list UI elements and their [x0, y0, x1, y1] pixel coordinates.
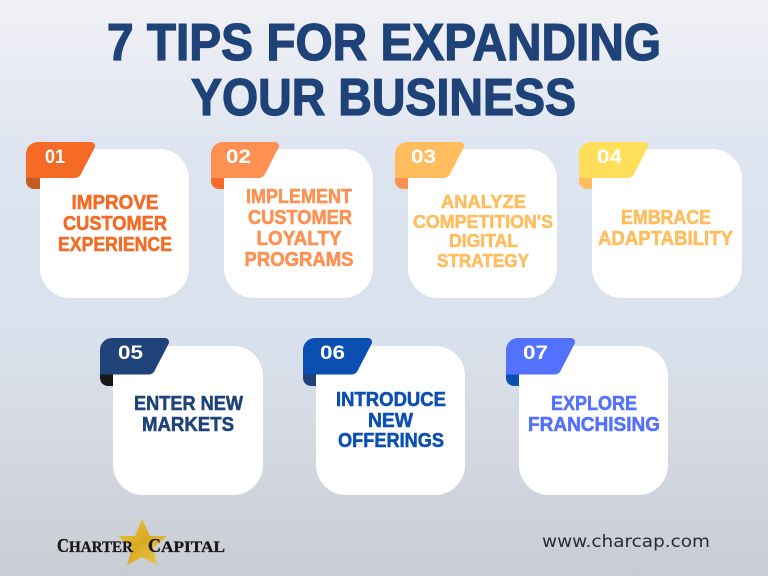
panel: tip 02: CUSTOMER — [248, 207, 352, 229]
panel: tip 03: 03 — [411, 147, 436, 168]
panel: tip 05 — [100, 338, 263, 495]
panel: tip 03 — [395, 142, 557, 298]
panel: tip 01: IMPROVE — [72, 192, 158, 214]
panel: tip 05: MARKETS — [142, 413, 234, 436]
panel: tip 04 — [579, 142, 742, 298]
panel: tip 01: CUSTOMER — [63, 213, 167, 235]
panel: tip 06: INTRODUCE — [336, 388, 446, 411]
panel: tip 07 — [506, 338, 668, 495]
panel: tip 01: EXPERIENCE — [58, 234, 172, 256]
website url: www.charcap.com — [542, 532, 710, 552]
title — [107, 14, 661, 127]
panel: tip 06 — [303, 338, 465, 495]
panel: tip 03: STRATEGY — [437, 250, 530, 271]
panel: tip 07: EXPLORE — [551, 392, 637, 415]
panel: tip 05: ENTER NEW — [134, 392, 244, 415]
panel: tip 01: 01 — [45, 147, 65, 168]
logo: Charter Capital: C — [148, 535, 161, 557]
panel: tip 04: ADAPTABILITY — [598, 228, 734, 250]
panel: tip 04: EMBRACE — [621, 207, 711, 229]
panel: tip 03: DIGITAL — [449, 230, 518, 251]
panel: tip 02: 02 — [226, 147, 251, 168]
panel: tip 02: LOYALTY — [256, 228, 342, 250]
panel: tip 05: 05 — [118, 343, 144, 364]
title: 7 TIPS FOR EXPANDING — [107, 14, 661, 72]
panel: tip 04: 04 — [597, 147, 623, 168]
panel: tip 06: 06 — [320, 343, 345, 364]
logo: Charter Capital: C — [57, 535, 69, 557]
panel: tip 02: PROGRAMS — [244, 249, 354, 271]
logo: Charter Capital — [57, 519, 225, 565]
title: YOUR BUSINESS — [191, 69, 576, 127]
panel: tip 07: FRANCHISING — [528, 413, 660, 436]
panel: tip 01 — [26, 142, 189, 298]
panel: tip 02: IMPLEMENT — [246, 186, 352, 208]
panel: tip 03: COMPETITION'S — [413, 211, 553, 232]
panel: tip 06: NEW — [368, 409, 414, 432]
panel: tip 02 — [211, 142, 373, 298]
icon: gold star — [118, 519, 167, 565]
logo: Charter Capital: HARTER — [69, 539, 134, 556]
panel: tip 07: 07 — [523, 343, 548, 364]
panel: tip 03: ANALYZE — [441, 191, 526, 212]
panel: tip 06: OFFERINGS — [338, 429, 444, 452]
logo: Charter Capital: APITAL — [161, 539, 225, 556]
